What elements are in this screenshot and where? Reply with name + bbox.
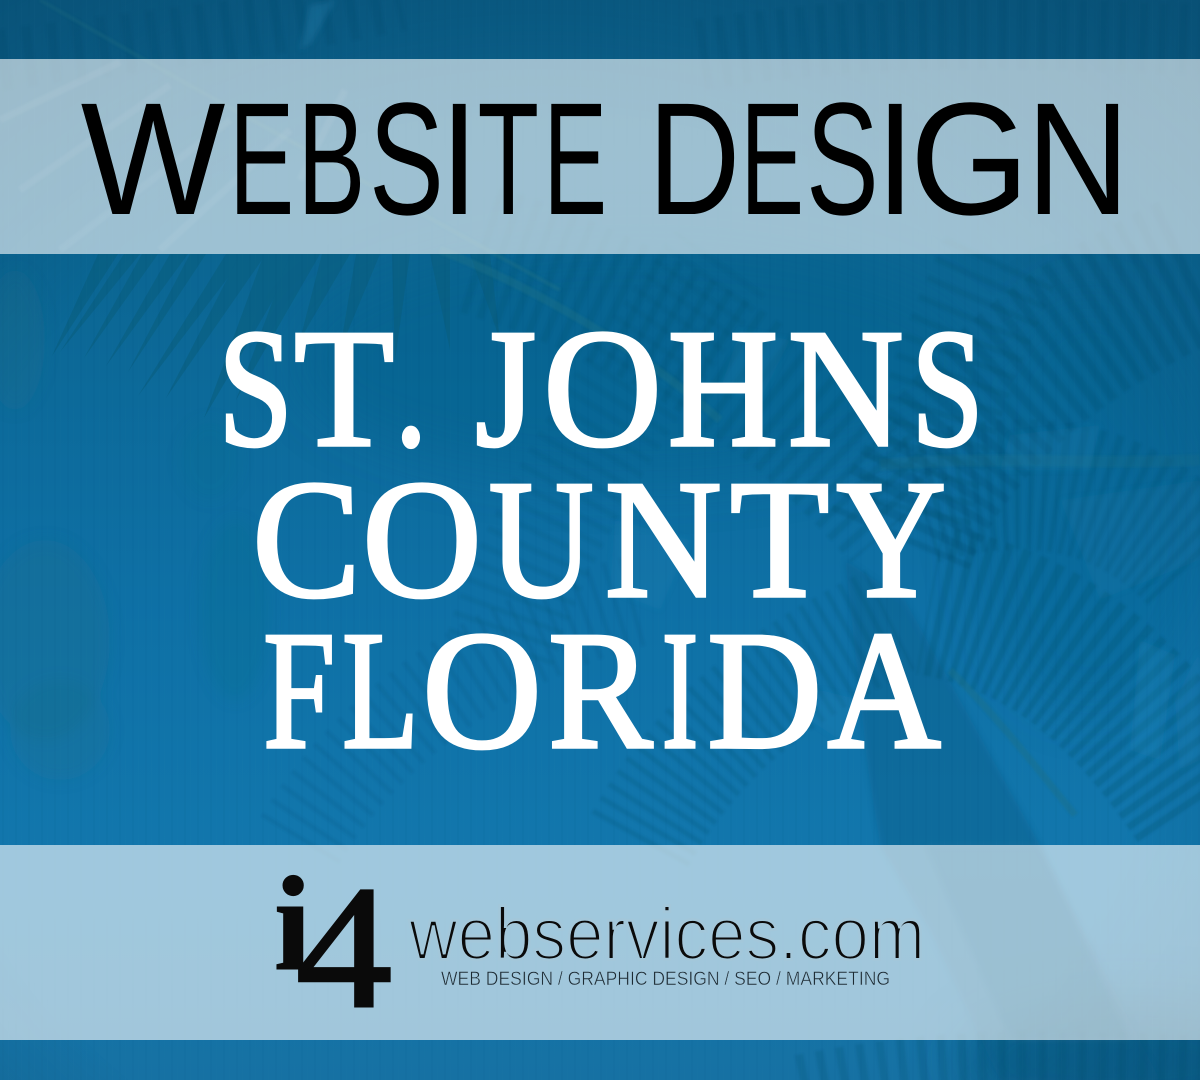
line: florida: R <box>548 596 653 784</box>
sky gaps between fronds <box>300 0 1200 770</box>
line: county <box>252 445 946 633</box>
pale leaf streaks in top band <box>0 62 345 250</box>
line: florida: D <box>707 596 822 784</box>
line: st. johns: H <box>668 294 778 482</box>
line: st. johns: J <box>475 294 536 482</box>
palm rachis lines <box>40 0 1200 815</box>
heading: website design: D <box>648 69 740 248</box>
heading: website design: S <box>369 69 444 248</box>
heading: website design: E <box>740 69 804 248</box>
heading: website design: B <box>298 69 365 248</box>
line: county: U <box>489 445 594 633</box>
heading: website design: S <box>806 69 879 248</box>
heading: website design: E <box>544 69 607 248</box>
line: florida: O <box>422 596 542 784</box>
drooping leaflets top left <box>52 254 500 418</box>
heading: website design: E <box>229 69 294 248</box>
heading: website design: T <box>478 69 539 248</box>
line: county: Y <box>836 445 946 633</box>
heading: website design: N <box>1026 69 1130 248</box>
line: county: C <box>252 445 361 633</box>
line: county: N <box>605 445 722 633</box>
line: florida: L <box>342 596 419 784</box>
top band <box>0 59 1200 254</box>
bottom band <box>0 845 1200 1040</box>
broad tonal shadows <box>300 240 1200 1080</box>
title: location name <box>218 294 984 784</box>
logo mark: i <box>274 850 312 999</box>
logo: i4 webservices <box>274 850 925 1044</box>
line: st. johns: S <box>218 294 293 482</box>
line: florida: I <box>662 596 698 784</box>
logo wordmark: webservices.com <box>408 892 925 976</box>
line: st. johns: S <box>911 294 984 482</box>
line: st. johns: . <box>395 294 427 482</box>
heading: website design: I <box>876 69 914 248</box>
palm trunk <box>845 560 1160 1080</box>
heading: website design <box>81 69 1130 248</box>
foliage at left edge <box>0 270 270 780</box>
line: st. johns: O <box>543 294 662 482</box>
line: florida: F <box>263 596 335 784</box>
line: st. johns: T <box>294 294 394 482</box>
trunk shade in bottom band <box>925 845 1130 1040</box>
line: st. johns <box>218 294 984 482</box>
logo tagline: WEB DESIGN / GRAPHIC DESIGN / SEO / MARKETING <box>441 968 890 990</box>
line: county: O <box>362 445 482 633</box>
heading: website design: I <box>440 69 478 248</box>
line: st. johns: N <box>788 294 904 482</box>
heading: website design: W <box>81 69 225 248</box>
heading: website design: G <box>910 69 1030 248</box>
logo mark: 4 <box>296 850 392 1044</box>
line: florida: A <box>827 596 941 784</box>
line: county: T <box>730 445 829 633</box>
line: florida <box>263 596 941 784</box>
